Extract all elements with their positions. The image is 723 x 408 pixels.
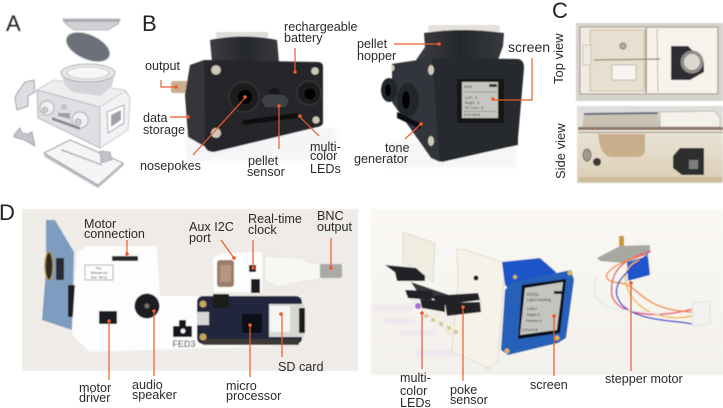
label: tone generator: generator	[354, 152, 408, 166]
label: pellet hopper: hopper	[357, 49, 396, 63]
label: Aux I2C port	[189, 220, 236, 260]
LCD screen: Left 0	[465, 96, 477, 101]
label: pellet hopper	[357, 37, 441, 63]
photo backdrop	[386, 140, 516, 168]
LCD screen: Pellets 0	[465, 106, 483, 111]
label: Aux I2C port: port	[189, 231, 211, 245]
label: micro processor: micro	[226, 379, 257, 393]
pellet sensor	[260, 88, 290, 108]
label: multi-color LEDs	[298, 114, 341, 176]
label: pellet sensor: pellet	[248, 154, 279, 168]
body	[392, 58, 524, 162]
device body	[37, 64, 130, 148]
label: SD card	[278, 312, 324, 374]
label: data storage: data	[143, 111, 168, 125]
screen module: Right 0	[527, 312, 540, 317]
panel B: device front photo	[171, 32, 336, 160]
white PCB	[72, 246, 300, 352]
label: poke sensor: sensor	[450, 393, 488, 407]
main PCB	[407, 296, 492, 370]
photo: cage top view	[576, 23, 723, 101]
label: multi-color LEDs, lower: color	[400, 384, 427, 398]
label: data storage: storage	[143, 123, 185, 137]
hopper neck	[210, 32, 279, 62]
SD card	[269, 304, 305, 337]
label: tone generator: tone	[385, 141, 410, 155]
device body	[185, 60, 323, 152]
label: screen: screen	[508, 39, 550, 55]
label: micro processor	[226, 323, 281, 403]
hopper	[416, 25, 504, 60]
label: audio speaker: audio	[132, 378, 163, 392]
label: rechargeable battery	[284, 20, 358, 74]
label: poke sensor	[450, 305, 488, 407]
LCD screen: Right 0	[465, 101, 479, 106]
label: output: output	[145, 59, 181, 73]
label: side view: Side view	[553, 123, 568, 179]
photo: circuit board, top	[22, 209, 358, 371]
white wire connector	[693, 301, 710, 326]
label: multi-color LEDs: color	[310, 149, 337, 163]
label: multi-color LEDs: LEDs	[310, 162, 341, 176]
photo backdrop	[186, 128, 336, 160]
label: pellet hopper: pellet	[357, 37, 388, 51]
label: micro processor: processor	[226, 389, 281, 403]
label: motor driver: motor	[79, 381, 111, 395]
motor wires	[594, 251, 692, 324]
audio speaker	[134, 294, 160, 318]
coin cell holder	[217, 260, 234, 287]
LED glow	[415, 303, 421, 309]
label: real-time clock: clock	[248, 223, 277, 237]
base plate	[44, 140, 124, 188]
label: rechargeable battery: rechargeable	[284, 20, 358, 34]
label: multi-color LEDs, lower: multi-	[400, 371, 431, 385]
label: nosepokes: nosepokes	[140, 159, 201, 173]
label: motor connection: Motor	[84, 217, 116, 231]
label: BNC output: BNC	[317, 209, 344, 223]
label: multi-color LEDs, lower	[400, 311, 431, 408]
label: nosepokes	[140, 95, 247, 173]
motor header	[112, 256, 138, 261]
screen module seen edge-on	[42, 220, 81, 330]
LED strip	[243, 113, 298, 125]
label: rechargeable battery: battery	[284, 31, 323, 45]
label: multi-color LEDs: multi-	[310, 140, 341, 154]
screen module: FED3	[527, 292, 539, 297]
photo: disassembled electronics	[371, 209, 723, 375]
FED3 logo	[172, 320, 196, 349]
research notice: For	[96, 266, 102, 272]
screen module	[501, 270, 574, 355]
BNC connector	[265, 256, 342, 287]
label: Aux I2C port: Aux I2C	[189, 220, 234, 234]
label: motor driver: driver	[79, 391, 110, 405]
light reflections	[372, 305, 455, 356]
motor driver chip	[99, 311, 117, 324]
research notice	[85, 265, 113, 280]
FED3 logo: FED3	[172, 339, 196, 349]
screen module: Pellets 0	[526, 318, 542, 323]
LCD screen	[457, 79, 504, 123]
label: stepper motor: stepper motor	[605, 372, 683, 386]
panel A: exploded device model	[6, 11, 130, 188]
label: tone generator	[354, 122, 423, 166]
label: motor connection: connection	[84, 227, 145, 241]
LCD screen: FED3	[464, 86, 472, 90]
label: pellet sensor: sensor	[247, 165, 285, 179]
label: audio speaker	[132, 309, 177, 402]
stepper motor	[597, 236, 650, 281]
screws	[211, 65, 320, 138]
panel B: heading: B	[142, 11, 157, 36]
label: data storage	[143, 111, 190, 137]
upright PCB	[452, 249, 505, 368]
nosepokes	[229, 81, 321, 112]
lid ring	[63, 19, 120, 30]
small clip	[14, 128, 35, 146]
photo background	[22, 209, 358, 371]
panel B: device screen-side photo	[381, 25, 524, 168]
label: screen, lower: screen	[530, 378, 568, 392]
label: poke sensor: poke	[450, 383, 477, 397]
magnets	[392, 65, 434, 146]
label: BNC output: output	[317, 220, 353, 234]
nosepokes	[381, 78, 419, 117]
RTC chips	[249, 265, 260, 293]
heading A: A	[6, 11, 21, 36]
rear PCB	[403, 232, 435, 282]
label: audio speaker: speaker	[132, 388, 177, 402]
research notice: Research	[91, 271, 107, 276]
label: motor connection	[84, 217, 145, 256]
label: output	[145, 59, 181, 89]
research notice: Use Only	[91, 276, 107, 280]
poke sensors	[385, 265, 481, 316]
screen module: 12/14/18	[522, 327, 538, 332]
label: stepper motor	[605, 281, 683, 386]
photo background	[371, 209, 723, 375]
label: motor driver	[79, 319, 111, 405]
BNC connector	[171, 77, 198, 95]
label: pellet sensor	[247, 104, 285, 179]
label: real-time clock: Real-time	[248, 212, 302, 226]
screen module: Light tracking	[527, 297, 551, 302]
label: BNC output	[317, 209, 353, 270]
label: real-time clock	[248, 212, 302, 270]
label: SD card: SD card	[278, 360, 324, 374]
LCD screen: 6/9/2018	[464, 113, 480, 118]
hopper disc	[62, 27, 114, 67]
tone generator grille	[397, 112, 422, 129]
screen module: Left 0	[527, 306, 538, 311]
blue motor behind screen	[502, 258, 556, 300]
LED row	[424, 314, 458, 334]
side clip	[15, 80, 35, 110]
label: top view: Top view	[551, 33, 566, 84]
label: screen, lower	[530, 314, 568, 392]
photo: cage side view	[577, 106, 723, 183]
microcontroller board	[197, 294, 302, 345]
label: screen	[491, 39, 550, 101]
